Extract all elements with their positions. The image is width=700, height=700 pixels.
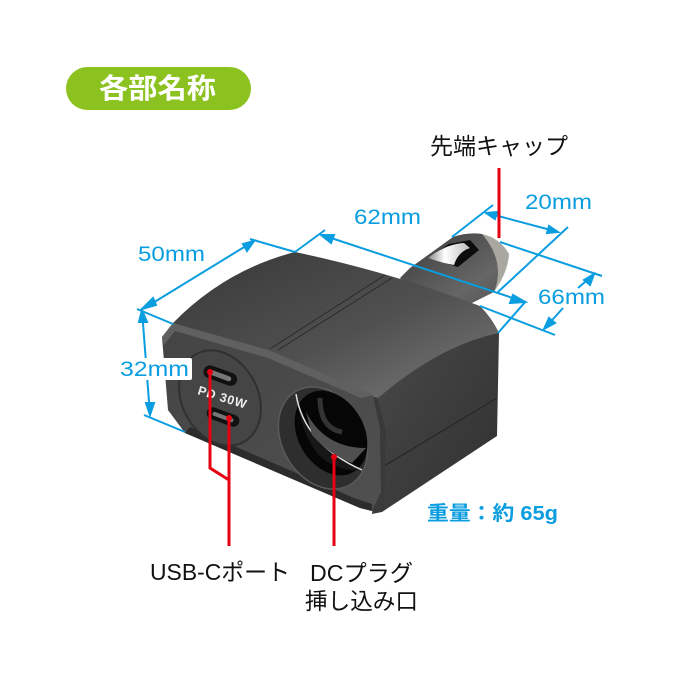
front face xyxy=(162,323,381,511)
leader: tip cap xyxy=(498,168,500,238)
label: 66mm: 66mm xyxy=(538,286,605,309)
dimension: 32mm xyxy=(139,310,185,432)
dimension: 66mm xyxy=(480,242,602,335)
dimension lines xyxy=(137,205,602,432)
label: 20mm: 20mm xyxy=(525,191,592,214)
label: 50mm: 50mm xyxy=(138,243,205,266)
dimension: 20mm xyxy=(452,205,568,292)
top seam xyxy=(270,275,392,350)
USB-C port upper xyxy=(202,364,239,388)
heading pill: 各部名称 xyxy=(99,73,216,104)
dimension: 62mm xyxy=(295,230,526,333)
leader: DC socket xyxy=(332,457,336,546)
label: DC plug insert xyxy=(305,560,418,614)
product: car socket adapter xyxy=(162,233,509,514)
front bevel band xyxy=(162,323,373,398)
label: 32mm: 32mm xyxy=(120,358,189,381)
label: DC plug insert: 挿し込み口 xyxy=(305,588,418,614)
USB-C port lower xyxy=(205,406,241,428)
label: DC plug insert: DCプラグ xyxy=(310,560,413,586)
DC socket xyxy=(260,371,386,505)
callout leaders xyxy=(210,168,499,546)
label: 62mm: 62mm xyxy=(354,206,421,229)
USB port panel xyxy=(163,336,277,460)
dimension: 50mm xyxy=(137,239,295,324)
PD 30W print: PD 30W xyxy=(196,383,249,412)
label: weight: 重量：約 65g xyxy=(427,502,558,525)
top surface xyxy=(173,252,499,398)
label: tip cap: 先端キャップ xyxy=(430,133,568,159)
label: USB-C port: USB-Cポート xyxy=(150,559,290,585)
leader: USB-C ports xyxy=(210,372,229,546)
heading pill xyxy=(66,67,251,110)
plug body xyxy=(400,233,509,304)
right side surface xyxy=(372,318,499,514)
